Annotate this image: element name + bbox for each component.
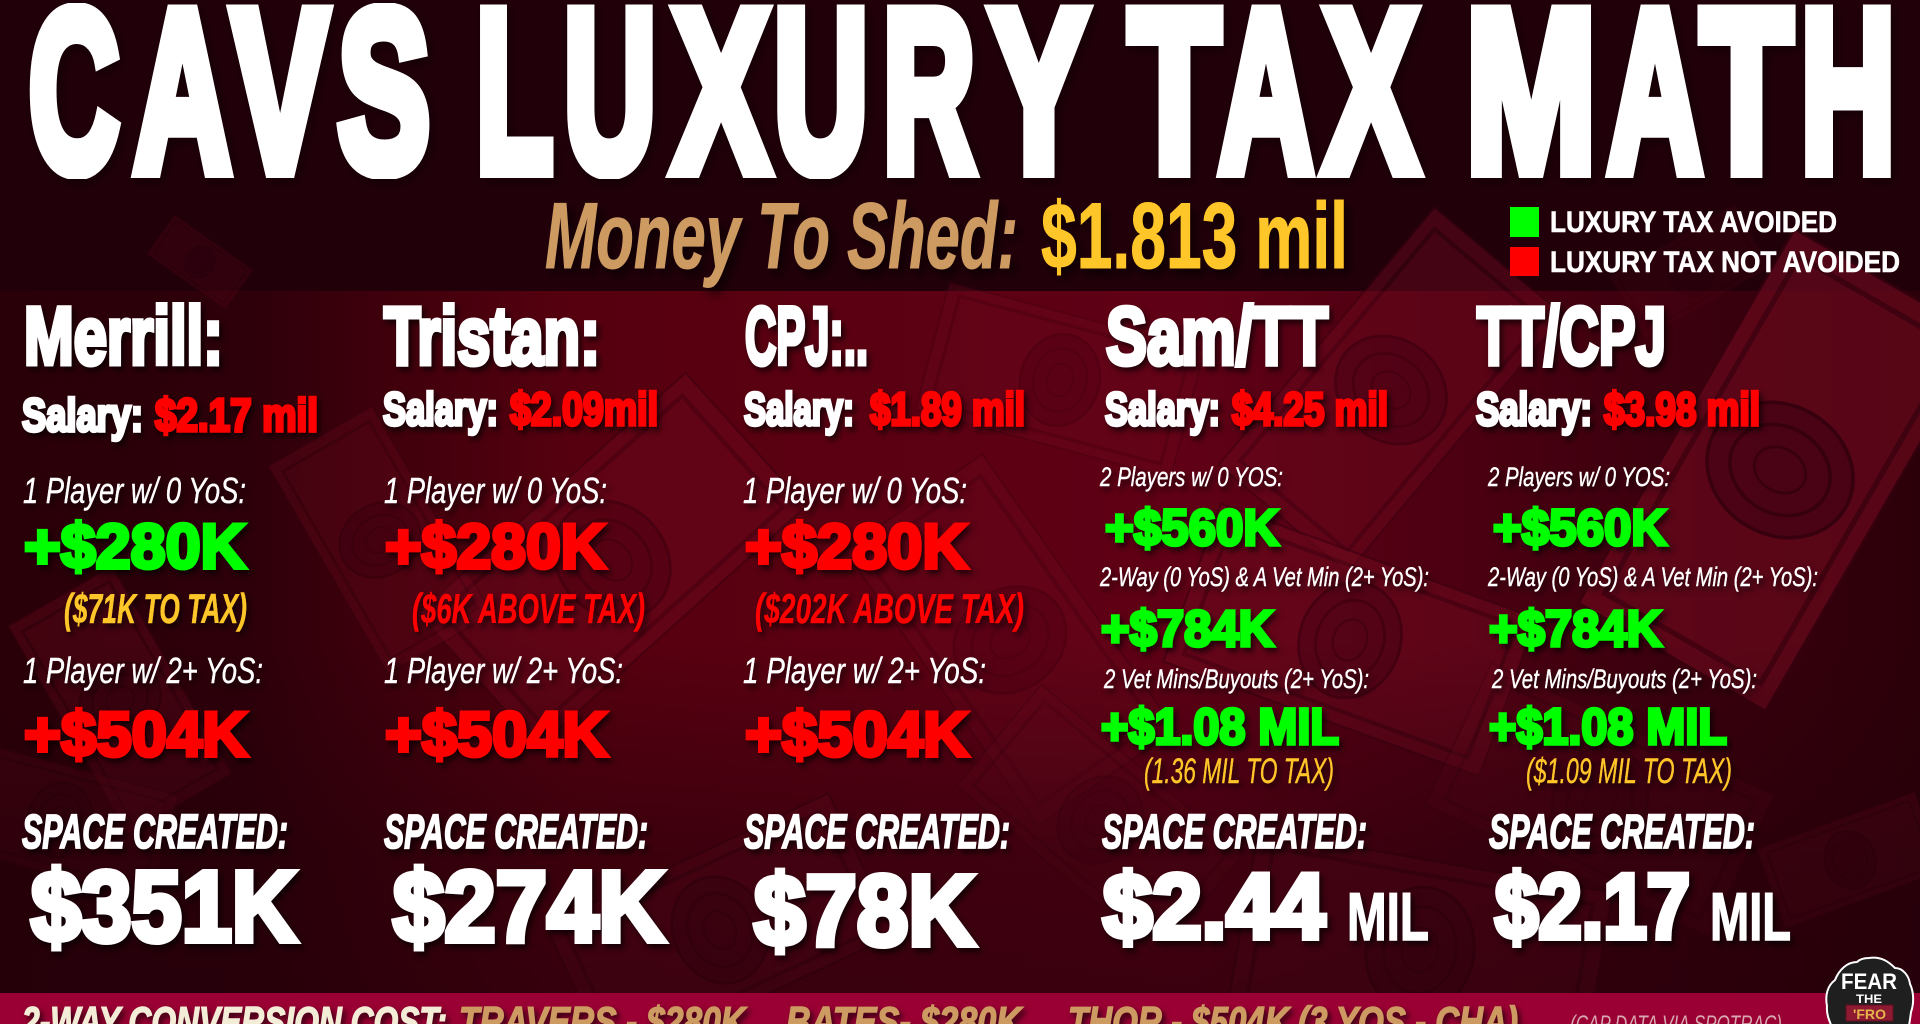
- panel: Tristan: $274K: [393, 851, 665, 963]
- panel: Sam/TT: 2-Way (0 YoS) & A Vet Min (2+ YoS):: [1099, 562, 1429, 592]
- panel: CPJ: 1 Player w/ 2+ YoS:: [743, 650, 986, 691]
- footer bar: [0, 993, 1920, 1024]
- panel: Sam/TT: (1.36 MIL TO TAX): [1144, 752, 1334, 791]
- panel: Merrill: 1 Player w/ 0 YoS:: [23, 470, 246, 511]
- subtitle: money to shed: Money To Shed:: [545, 183, 1018, 288]
- panel: Sam/TT: +$1.08 MIL: [1101, 698, 1339, 755]
- panel: Merrill: +$504K: [24, 700, 248, 770]
- panel: Merrill: $2.17 mil: [155, 389, 318, 441]
- panel: Sam/TT: Salary:: [1105, 383, 1220, 435]
- panel: Sam/TT: [1099, 291, 1429, 958]
- panel: Merrill: $351K: [31, 851, 297, 963]
- legend: LUXURY TAX AVOIDED: [1550, 206, 1837, 239]
- footer text: 2-way conversion costs: [21, 998, 1518, 1024]
- panel: TT/CPJ: +$1.08 MIL: [1489, 698, 1727, 755]
- panel: Tristan: +$504K: [385, 700, 608, 770]
- panel: Merrill: SPACE CREATED:: [22, 806, 288, 859]
- panel: CPJ: $1.89 mil: [870, 383, 1025, 435]
- logo: Fear the 'Fro: [1826, 958, 1913, 1024]
- panel: Merrill: Salary:: [22, 389, 143, 441]
- panel: Tristan: 1 Player w/ 0 YoS:: [384, 470, 607, 511]
- panel: Merrill: 1 Player w/ 2+ YoS:: [23, 650, 263, 691]
- legend: [1510, 206, 1900, 279]
- panel: Tristan: Tristan:: [384, 291, 600, 382]
- panel: Tristan: SPACE CREATED:: [384, 806, 648, 859]
- panel: Sam/TT: 2 Vet Mins/Buyouts (2+ YoS):: [1103, 664, 1369, 694]
- panel: Merrill: Merrill:: [24, 291, 223, 382]
- panel: Sam/TT: +$784K: [1101, 600, 1274, 657]
- panel: TT/CPJ: TT/CPJ: [1477, 291, 1666, 382]
- panel: TT/CPJ: $2.17: [1495, 856, 1690, 958]
- panel: Sam/TT: $4.25 mil: [1232, 383, 1388, 435]
- panel: TT/CPJ: [1476, 291, 1818, 958]
- panel: Sam/TT: MIL: [1347, 879, 1429, 955]
- panel: TT/CPJ: 2 Vet Mins/Buyouts (2+ YoS):: [1491, 664, 1757, 694]
- logo: Fear the 'Fro: 'FRO: [1853, 1006, 1886, 1022]
- panel: TT/CPJ: 2-Way (0 YoS) & A Vet Min (2+ YoS):: [1487, 562, 1818, 592]
- logo: Fear the 'Fro: THE: [1856, 992, 1882, 1006]
- panel: CPJ: 1 Player w/ 0 YoS:: [743, 470, 967, 511]
- panel: Tristan: $2.09mil: [510, 383, 658, 435]
- panel: CPJ: $78K: [754, 855, 975, 967]
- panel: TT/CPJ: ($1.09 MIL TO TAX): [1526, 752, 1732, 791]
- panel: TT/CPJ: +$560K: [1493, 499, 1667, 556]
- panel: Tristan: Salary:: [383, 383, 498, 435]
- panel: CPJ: +$504K: [745, 700, 969, 770]
- panel: TT/CPJ: Salary:: [1476, 383, 1592, 435]
- title: [30, 3, 1894, 182]
- panel: Sam/TT: Sam/TT: [1106, 291, 1328, 382]
- panel: CPJ: ($202K ABOVE TAX): [755, 585, 1024, 632]
- panel: TT/CPJ: SPACE CREATED:: [1489, 806, 1755, 859]
- panel: TT/CPJ: +$784K: [1489, 600, 1662, 657]
- panel: Sam/TT: 2 Players w/ 0 YOS:: [1099, 462, 1283, 492]
- panel: Tristan: +$280K: [385, 512, 606, 582]
- panel: Sam/TT: +$560K: [1105, 499, 1279, 556]
- panel: Tristan: ($6K ABOVE TAX): [412, 585, 645, 632]
- background: scattered banknotes: [0, 205, 1920, 1024]
- panel: Tristan: [383, 291, 665, 963]
- panel: CPJ: CPJ:..: [745, 291, 868, 382]
- panel: Merrill: [22, 291, 318, 963]
- panel: CPJ: +$280K: [745, 512, 968, 582]
- panel: CPJ: Salary:: [744, 383, 854, 435]
- subtitle: money to shed: $1.813 mil: [1041, 183, 1348, 288]
- panel: Merrill: ($71K TO TAX): [64, 585, 247, 632]
- panel: Sam/TT: SPACE CREATED:: [1102, 806, 1367, 859]
- panel: Merrill: +$280K: [24, 512, 246, 582]
- panel: Sam/TT: $2.44: [1103, 856, 1325, 958]
- panel: TT/CPJ: $3.98 mil: [1604, 383, 1760, 435]
- panel: CPJ: SPACE CREATED:: [744, 806, 1010, 859]
- logo: Fear the 'Fro: FEAR: [1841, 969, 1897, 994]
- panel: TT/CPJ: 2 Players w/ 0 YOS:: [1487, 462, 1670, 492]
- panel: CPJ: [743, 291, 1025, 967]
- panel: TT/CPJ: MIL: [1710, 879, 1791, 955]
- panel: Tristan: 1 Player w/ 2+ YoS:: [384, 650, 623, 691]
